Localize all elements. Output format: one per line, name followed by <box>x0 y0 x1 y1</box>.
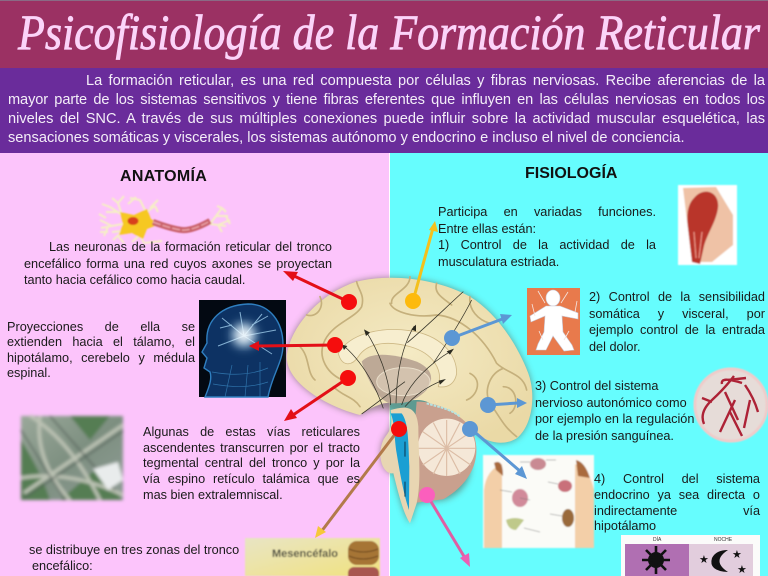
text: sensibilidad: somática y visceral, por <box>589 307 765 321</box>
intro text panel <box>0 68 768 153</box>
label: día: DÍA <box>653 536 662 543</box>
text: vías reticulares: mas bien extralemniscal. <box>143 488 283 502</box>
arrow: red to neuron text <box>283 271 357 310</box>
cerebrum <box>287 278 532 443</box>
text: sistema endocrino: endocrino ya sea directa o <box>594 488 760 502</box>
intro text panel: mayor parte de los sistemas sensitivos y tiene fibras eferentes que influyen en las células nerviosas en todos los <box>8 92 765 108</box>
text: proyecciones: espinal. <box>7 366 51 380</box>
text: tres zonas <box>29 543 239 573</box>
image: endocrine glands <box>483 455 594 548</box>
text: vías reticulares: ascendentes transcurren por el tracto <box>143 441 360 455</box>
arrow: blue to pain figure <box>444 314 512 346</box>
text: sistema endocrino: hipotálamo <box>594 519 656 533</box>
text: sistema endocrino: 4) Control del sistema <box>594 472 760 486</box>
text: sistema endocrino <box>594 472 760 533</box>
text: participa: Participa en variadas funciones. <box>438 205 656 219</box>
arrow: pink downward <box>419 487 470 567</box>
brainstem <box>380 408 419 523</box>
text: sistema autonómico: 3) Control del sistema <box>535 379 658 393</box>
neural pathway arrows <box>344 292 472 414</box>
text: proyecciones: extienden hacia el tálamo, el <box>7 335 195 349</box>
arrow: red to pathways text <box>284 370 356 421</box>
heading: fisiología: FISIOLOGÍA <box>525 165 617 182</box>
image: muscle arm <box>678 185 737 265</box>
text: neuronas: tanto hacia cefálico como hacia caudal. <box>24 273 245 287</box>
text: sensibilidad: del dolor. <box>589 340 640 354</box>
text: neuronas: encefálico forma una red cuyos axones se proyectan <box>24 256 332 270</box>
label: noche: NOCHE <box>714 537 733 543</box>
text: sistema autonómico: por ejemplo en la regulación <box>535 412 694 426</box>
intro text panel: La formación reticular, es una red compuesta por células y fibras nerviosas. Recibe aferencias de la <box>86 73 765 89</box>
text: sistema autonómico: de la presión sanguínea. <box>535 429 674 443</box>
corpus callosum <box>338 330 457 387</box>
text: participa: Entre ellas están: <box>438 222 536 236</box>
image: day and night chart <box>621 535 760 576</box>
arrow: yellow to functions text <box>405 221 438 309</box>
text: sensibilidad: 2) Control de la sensibilidad <box>589 290 765 304</box>
text: vías reticulares <box>143 425 360 502</box>
arrow: red to head image <box>249 337 343 353</box>
text: neuronas <box>24 240 332 287</box>
image: blood vessels <box>694 368 768 442</box>
thalamus <box>362 355 431 403</box>
cerebellum <box>413 402 476 503</box>
arrow: red to mesencephalon <box>315 421 407 538</box>
text: participa: 1) Control de la actividad de la <box>438 238 656 252</box>
intro text panel: sensaciones somáticas y viscerales, los sistemas autónomo y endocrino e incluso el nivel de conciencia. <box>8 130 685 146</box>
image: pain figure <box>527 288 580 355</box>
text: participa: musculatura estriada. <box>438 255 559 269</box>
text: tres zonas: encefálico: <box>32 559 93 573</box>
intro text panel: niveles del SNC. A través de sus múltiples conexiones puede influir sobre la actividad muscular esquelética, las <box>8 111 765 127</box>
text: vías reticulares: tegmental central del tronco y por la <box>143 456 360 470</box>
heading: anatomía: ANATOMÍA <box>120 168 207 185</box>
text: sensibilidad <box>589 290 765 354</box>
image: day and night chart: ★ <box>732 548 742 561</box>
label: mesencéfalo: Mesencéfalo <box>272 548 338 560</box>
text: proyecciones <box>7 320 196 380</box>
image: highway interchange <box>21 416 123 500</box>
text: sistema autonómico: nervioso autonómico como <box>535 396 687 410</box>
gyri folds <box>300 277 527 437</box>
text: proyecciones: Proyecciones de ella se <box>7 320 195 334</box>
text: vías reticulares: Algunas de estas vías reticulares <box>143 425 360 439</box>
text: tres zonas: se distribuye en tres zonas del tronco <box>29 543 239 557</box>
text: sistema endocrino: indirectamente vía <box>594 504 760 518</box>
text: sistema autonómico <box>535 379 694 443</box>
arrow: blue to autonomic text <box>480 397 527 413</box>
brain illustration <box>287 277 532 523</box>
image: mesencephalon diagram <box>245 538 380 576</box>
icon: neuron <box>99 196 230 243</box>
image: day and night chart: ★ <box>699 553 709 566</box>
text: neuronas: Las neuronas de la formación reticular del tronco <box>49 240 332 254</box>
text: participa <box>438 205 656 269</box>
panel: physiology background <box>390 153 768 576</box>
text: sensibilidad: ejemplo control de la entrada <box>589 323 765 337</box>
panel: anatomy background <box>0 153 389 576</box>
image: glowing head <box>199 300 286 397</box>
image: day and night chart: ★ <box>737 563 747 576</box>
text: vías reticulares: vía espino retículo talámica que es <box>143 472 360 486</box>
text: proyecciones: hipotálamo, cerebelo y médula <box>7 351 195 365</box>
arrow: blue to endocrine image <box>462 421 527 479</box>
